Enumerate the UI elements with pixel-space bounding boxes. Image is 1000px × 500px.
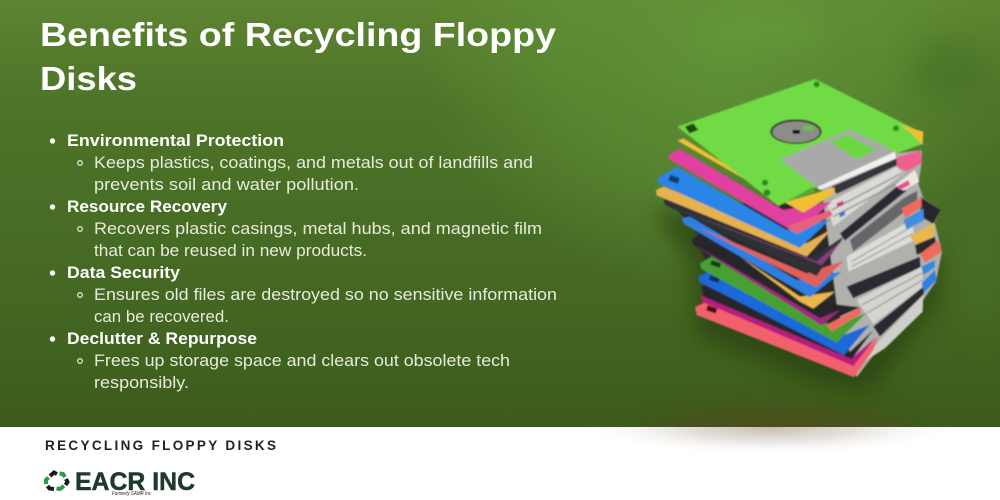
footer band (0, 427, 1000, 500)
photo: stack of floppy disks (653, 79, 942, 390)
item: resource recovery (50, 198, 542, 260)
notches (685, 123, 698, 133)
reflection shadow (575, 427, 965, 485)
dark stack core (670, 203, 880, 377)
logo: EACR INC: Formerly SAMR Inc (112, 491, 151, 497)
item: environmental protection: Keeps plastics, coatings, and metals out of landfills and (94, 154, 533, 172)
disk: blue (698, 271, 869, 355)
title: Disks (40, 60, 137, 97)
disk: dark (663, 198, 844, 276)
disk: magenta (701, 292, 877, 366)
footer caption: RECYCLING FLOPPY DISKS (45, 438, 276, 453)
item: environmental protection: Environmental Protection (67, 132, 284, 150)
item: data security (50, 264, 557, 326)
disk: yellow (740, 257, 835, 309)
title: Benefits of Recycling Floppy (40, 16, 557, 53)
cut-in corners (827, 167, 903, 227)
metal shutter (780, 129, 895, 187)
item: environmental protection: prevents soil and water pollution. (94, 176, 359, 194)
hub (770, 119, 822, 144)
item: data security: Data Security (67, 264, 181, 282)
item: declutter and repurpose: responsibly. (94, 374, 189, 392)
disk: black (702, 283, 873, 359)
item: declutter and repurpose (50, 330, 510, 392)
disk: magenta top (668, 149, 832, 233)
item: declutter and repurpose: Declutter & Repurpose (67, 330, 257, 348)
icon: recycling symbol (46, 472, 68, 489)
item: environmental protection (50, 132, 533, 194)
item: data security: Ensures old files are destroyed so no sensitive information (94, 286, 557, 304)
disk: yellow top (677, 138, 835, 213)
disk edges block (822, 150, 942, 377)
logo: EACR INC: EACR INC (75, 468, 195, 496)
benefits list (50, 132, 557, 392)
disk: blue top (657, 167, 830, 248)
disk: green top (677, 79, 923, 206)
item: resource recovery: Resource Recovery (67, 198, 228, 216)
disk: salmon edge (827, 307, 862, 332)
item: resource recovery: Recovers plastic casings, metal hubs, and magnetic film (94, 220, 542, 238)
disk stack shadow (653, 210, 940, 390)
side tabs (920, 197, 941, 224)
disk: green (700, 257, 867, 343)
item: declutter and repurpose: Frees up storage space and clears out obsolete tech (94, 352, 510, 370)
disk: yellow long (656, 187, 832, 257)
disk: dark purple (692, 232, 860, 325)
item: data security: can be recovered. (94, 308, 229, 326)
disk: salmon mid (697, 227, 844, 287)
disk: salmon (695, 301, 878, 377)
item: resource recovery: that can be reused in new products. (94, 242, 367, 260)
title (40, 16, 557, 97)
disk: mid blue (682, 217, 842, 297)
